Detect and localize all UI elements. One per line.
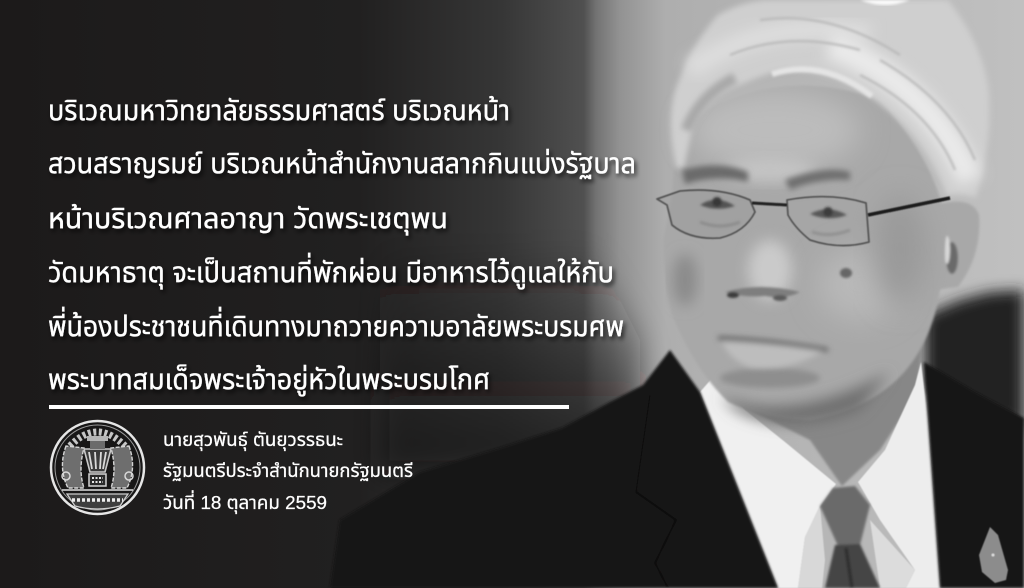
face highlights [673,90,926,424]
body text: พี่น้องประชาชนที่เดินทางมาถวายความอาลัยพระบรมศพ [48,306,624,343]
body text: หน้าบริเวณศาลอาญา วัดพระเชตุพน [48,203,448,235]
signature text block: รัฐมนตรีประจำสำนักนายกรัฐมนตรี [163,460,413,481]
glasses [657,190,950,246]
mole [840,268,852,278]
nose [725,287,800,301]
face [663,85,945,420]
lapel pin [979,527,1008,583]
emblem: government seal [51,421,144,514]
body text: พระบาทสมเด็จพระเจ้าอยู่หัวในพระบรมโกศ [48,364,490,397]
eyebrows [682,165,850,190]
dark background right of the neck [925,290,1024,430]
eyes [700,197,850,235]
neck [720,320,925,486]
portrait photo [330,0,1024,588]
suit jacket [330,350,1024,588]
necktie [820,486,880,588]
body text [48,95,636,397]
body text: สวนสราญรมย์ บริเวณหน้าสำนักงานสลากกินแบ่งรัฐบาล [48,148,636,180]
signature text block [163,429,413,514]
signature text block: วันที่ 18 ตุลาคม 2559 [163,490,327,514]
ear [935,202,979,290]
shirt collar [700,362,940,588]
body text: วัดมหาธาตุ จะเป็นสถานที่พักผ่อน มีอาหารไว้ดูแลให้กับ [48,252,614,290]
signature text block: นายสุวพันธุ์ ตันยุวรรธนะ [163,429,343,451]
hair [671,0,990,198]
body text: บริเวณมหาวิทยาลัยธรรมศาสตร์ บริเวณหน้า [48,95,510,127]
divider rule [49,405,569,409]
mouth [718,338,828,368]
